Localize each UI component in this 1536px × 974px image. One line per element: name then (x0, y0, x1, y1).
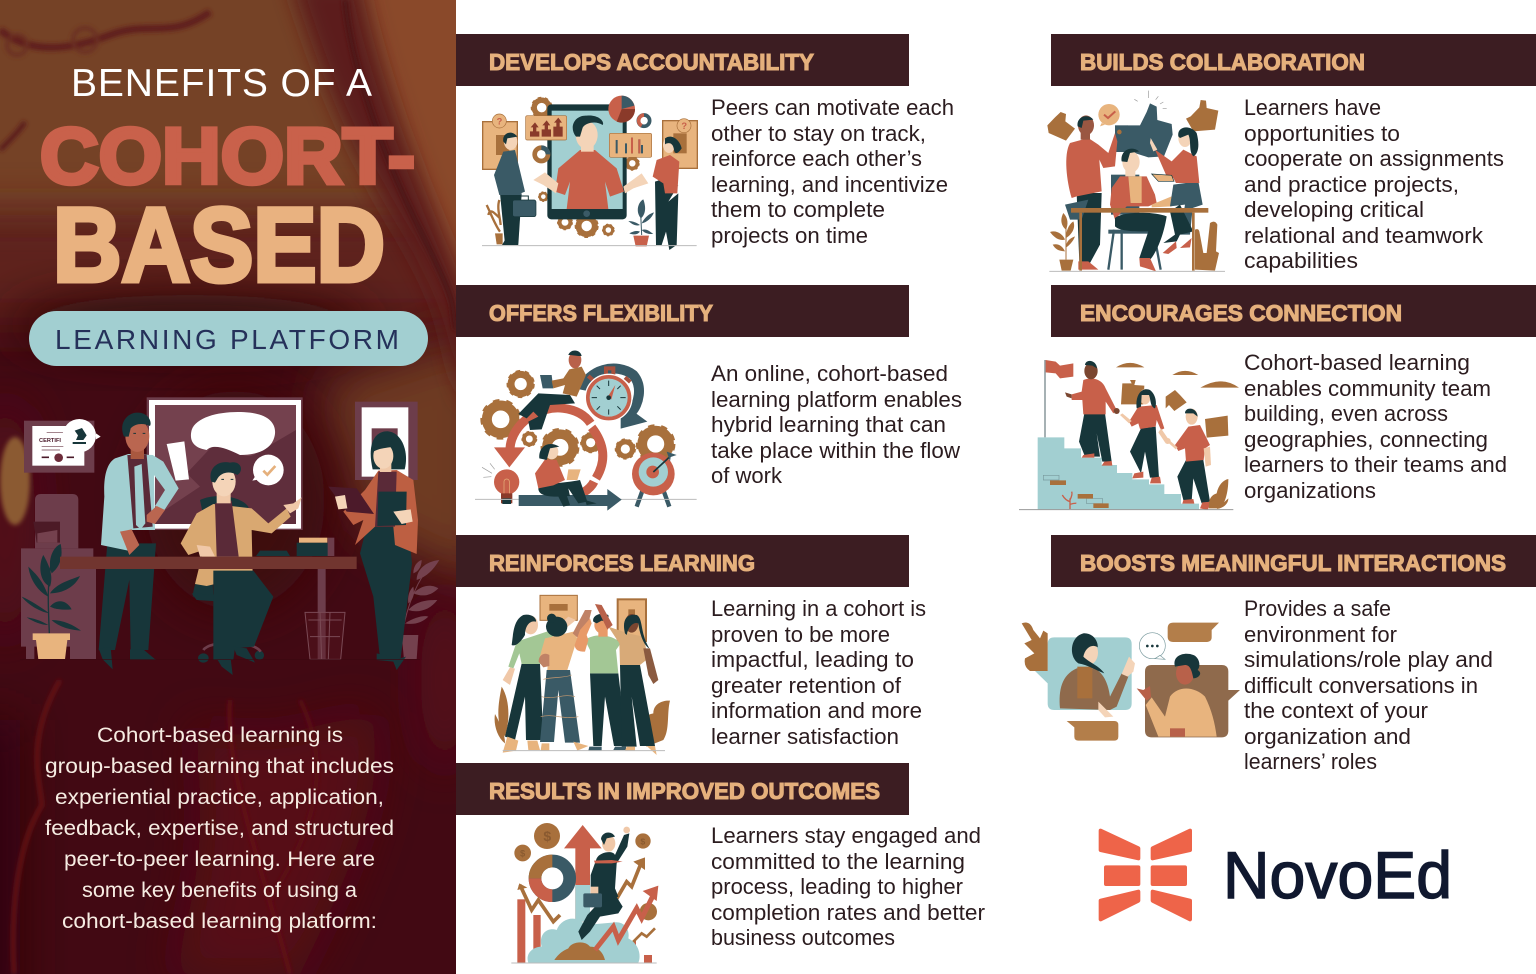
text: offers flexibility: take place within the flow (711, 438, 960, 463)
seated man in tan jacket (181, 462, 302, 675)
illustration: flexible work gears and clock (475, 350, 697, 511)
text: builds collaboration: developing critical (1244, 197, 1424, 222)
text: develops accountability (711, 95, 954, 248)
intro paragraph: feedback, expertise, and structured (45, 817, 394, 840)
aqua video card with woman (1022, 622, 1135, 717)
text: boosts meaningful interactions: environment for (1244, 622, 1397, 647)
panel: left background (0, 0, 456, 974)
illustration: rising success chart (511, 823, 658, 963)
heading: results in improved outcomes: RESULTS IN IMPROVED OUTCOMES (489, 778, 880, 804)
text: builds collaboration: cooperate on assignments (1244, 146, 1504, 171)
panel: develops accountability (456, 34, 954, 250)
text: encourages connection: building, even across (1244, 401, 1448, 426)
text: builds collaboration: capabilities (1244, 248, 1358, 273)
text: offers flexibility: learning platform enables (711, 387, 962, 412)
staircase (1038, 437, 1199, 509)
text: reinforces learning: impactful, leading to (711, 647, 914, 672)
panel: offers flexibility (456, 285, 962, 511)
intro paragraph: some key benefits of using a (82, 879, 357, 902)
panel: reinforces learning (456, 535, 926, 755)
whiteboard picture (147, 397, 303, 530)
woman with tablet (328, 431, 418, 670)
cloud (528, 919, 640, 963)
text: encourages connection: organizations (1244, 478, 1376, 503)
text: offers flexibility: of work (711, 463, 783, 488)
logo: NovoEd (1101, 831, 1452, 919)
woman thinking (653, 137, 682, 250)
illustration: tablet presenter: ? (497, 116, 503, 126)
woman sitting on desk (1150, 127, 1203, 254)
text: develops accountability: other to stay on track, (711, 121, 926, 146)
heading: encourages connection (1051, 285, 1536, 337)
text: encourages connection: Cohort-based learning (1244, 350, 1470, 375)
title: cohort: COHORT- (40, 111, 415, 200)
illustration: office team meeting (20, 397, 439, 675)
text: builds collaboration: opportunities to (1244, 121, 1400, 146)
small man (1165, 409, 1212, 510)
text: results in improved outcomes: business outcomes (711, 925, 895, 950)
big thumbs up (1115, 91, 1173, 157)
pie chart (608, 96, 635, 123)
text: results in improved outcomes: committed to the learning (711, 849, 965, 874)
logo mark (1101, 831, 1190, 919)
card: bar chart (609, 133, 652, 157)
title: benefits of a: BENEFITS OF A (71, 62, 372, 105)
man on laptop (518, 350, 586, 430)
text: builds collaboration: relational and teamwork (1244, 223, 1484, 248)
jumping businessman (578, 827, 630, 940)
text: boosts meaningful interactions: learners’ roles (1244, 749, 1377, 774)
check bubble (1098, 104, 1120, 126)
framed picture (355, 402, 418, 480)
text: boosts meaningful interactions: simulations/role play and (1244, 647, 1493, 672)
heading: builds collaboration (1051, 34, 1536, 86)
text: boosts meaningful interactions: Provides a safe (1244, 596, 1391, 621)
text: encourages connection (1244, 350, 1507, 503)
illustration: team climbing stairs (1019, 360, 1239, 510)
text: builds collaboration: Learners have (1244, 95, 1381, 120)
illustration: rising success chart: $ (640, 836, 645, 846)
heading: builds collaboration: BUILDS COLLABORATION (1080, 49, 1365, 75)
heading: reinforces learning (456, 535, 909, 587)
logo wordmark: NovoEd (1223, 838, 1452, 912)
text: reinforces learning: learner satisfaction (711, 724, 899, 749)
tablet device (547, 104, 627, 219)
text: offers flexibility: hybrid learning that can (711, 412, 946, 437)
seated man (1108, 149, 1177, 271)
illustration: video conversation (1022, 622, 1240, 741)
rising arrow (595, 895, 653, 950)
illustration: team high five (495, 595, 670, 755)
speech bubble dots (1139, 633, 1165, 659)
desk with books (60, 538, 357, 659)
presenter (533, 116, 648, 209)
certificate on the wall: CERTIFI (39, 438, 61, 444)
waste basket (305, 612, 345, 659)
lightbulb (482, 463, 519, 504)
certificate on the wall (24, 419, 101, 473)
intro paragraph (45, 724, 394, 933)
cactus right (1195, 222, 1219, 271)
heading: boosts meaningful interactions: BOOSTS MEANINGFUL INTERACTIONS (1080, 550, 1506, 576)
man high five (575, 614, 627, 751)
panel: builds collaboration (1047, 34, 1536, 273)
text: reinforces learning: Learning in a cohort is (711, 596, 926, 621)
coffee machine and cabinet (21, 494, 96, 659)
woman (1120, 389, 1169, 483)
intro paragraph: group-based learning that includes (45, 755, 394, 778)
panel: boosts meaningful interactions (1022, 535, 1536, 774)
woman on laptop (535, 444, 597, 507)
text: develops accountability: reinforce each other’s (711, 146, 922, 171)
pill: learning platform: LEARNING PLATFORM (55, 324, 399, 355)
text: results in improved outcomes: process, leading to higher (711, 874, 963, 899)
text: builds collaboration: and practice projects, (1244, 172, 1459, 197)
text: develops accountability: Peers can motivate each (711, 95, 954, 120)
heading: offers flexibility: OFFERS FLEXIBILITY (489, 300, 713, 326)
intro paragraph: cohort-based learning platform: (62, 910, 377, 933)
text: reinforces learning: information and more (711, 698, 922, 723)
text: develops accountability: learning, and incentivize (711, 172, 948, 197)
plant left (1050, 213, 1075, 271)
card: pawn chart (526, 116, 567, 140)
text: encourages connection: geographies, connecting (1244, 427, 1488, 452)
text: results in improved outcomes: Learners stay engaged and (711, 823, 981, 848)
woman 1 (503, 615, 576, 753)
panel: results in improved outcomes (456, 763, 985, 963)
text: reinforces learning: proven to be more (711, 622, 890, 647)
donut chart (535, 861, 570, 896)
heading: boosts meaningful interactions (1051, 535, 1536, 587)
text: offers flexibility: An online, cohort-based (711, 361, 948, 386)
intro paragraph: peer-to-peer learning. Here are (64, 848, 375, 871)
text: builds collaboration (1244, 95, 1504, 273)
illustration: tablet presenter: ? (681, 121, 687, 131)
circular arrows (510, 369, 639, 493)
intro paragraph: experiential practice, application, (55, 786, 384, 809)
tall man (1065, 361, 1120, 466)
text: reinforces learning (711, 596, 926, 749)
heading: develops accountability (456, 34, 909, 86)
heading: results in improved outcomes (456, 763, 909, 815)
text: boosts meaningful interactions: the context of your (1244, 698, 1428, 723)
panel: encourages connection (1019, 285, 1536, 510)
flag (1045, 360, 1073, 437)
stopwatch (585, 368, 632, 421)
heading: reinforces learning: REINFORCES LEARNING (489, 550, 755, 576)
standing man (1065, 115, 1117, 270)
text: develops accountability: projects on time (711, 223, 868, 248)
potted plant (22, 544, 81, 659)
desk (1071, 208, 1208, 271)
text: results in improved outcomes: completion rates and better (711, 900, 985, 925)
illustration: team around desk with thumbs up (1047, 91, 1225, 271)
standing man in aqua jacket (99, 413, 179, 669)
brown video card with man (1137, 654, 1240, 737)
side plant (402, 560, 439, 659)
woman 2 back view (539, 610, 592, 751)
woman 4 (595, 604, 658, 755)
target (632, 452, 677, 507)
text: develops accountability: them to complete (711, 197, 885, 222)
text: encourages connection: enables community team (1244, 376, 1491, 401)
text: boosts meaningful interactions: organization and (1244, 724, 1411, 749)
pill: learning platform (29, 311, 428, 366)
title: based: BASED (53, 187, 385, 304)
text: boosts meaningful interactions: difficult conversations in (1244, 673, 1478, 698)
bottom arrow (519, 489, 622, 511)
text: offers flexibility (711, 361, 962, 488)
illustration: rising success chart: $ (543, 828, 551, 844)
man with briefcase (487, 133, 536, 245)
potted plant (628, 199, 654, 246)
intro paragraph: Cohort-based learning is (97, 724, 343, 747)
text: reinforces learning: greater retention of (711, 673, 902, 698)
text: encourages connection: learners to their teams and (1244, 452, 1507, 477)
text: results in improved outcomes (711, 823, 985, 950)
heading: develops accountability: DEVELOPS ACCOUNTABILITY (489, 49, 814, 75)
heading: offers flexibility (456, 285, 909, 337)
heading: encourages connection: ENCOURAGES CONNECTION (1080, 300, 1402, 326)
illustration: tablet presenter (482, 96, 697, 250)
illustration: rising success chart: $ (520, 848, 526, 858)
text: boosts meaningful interactions (1244, 596, 1493, 774)
